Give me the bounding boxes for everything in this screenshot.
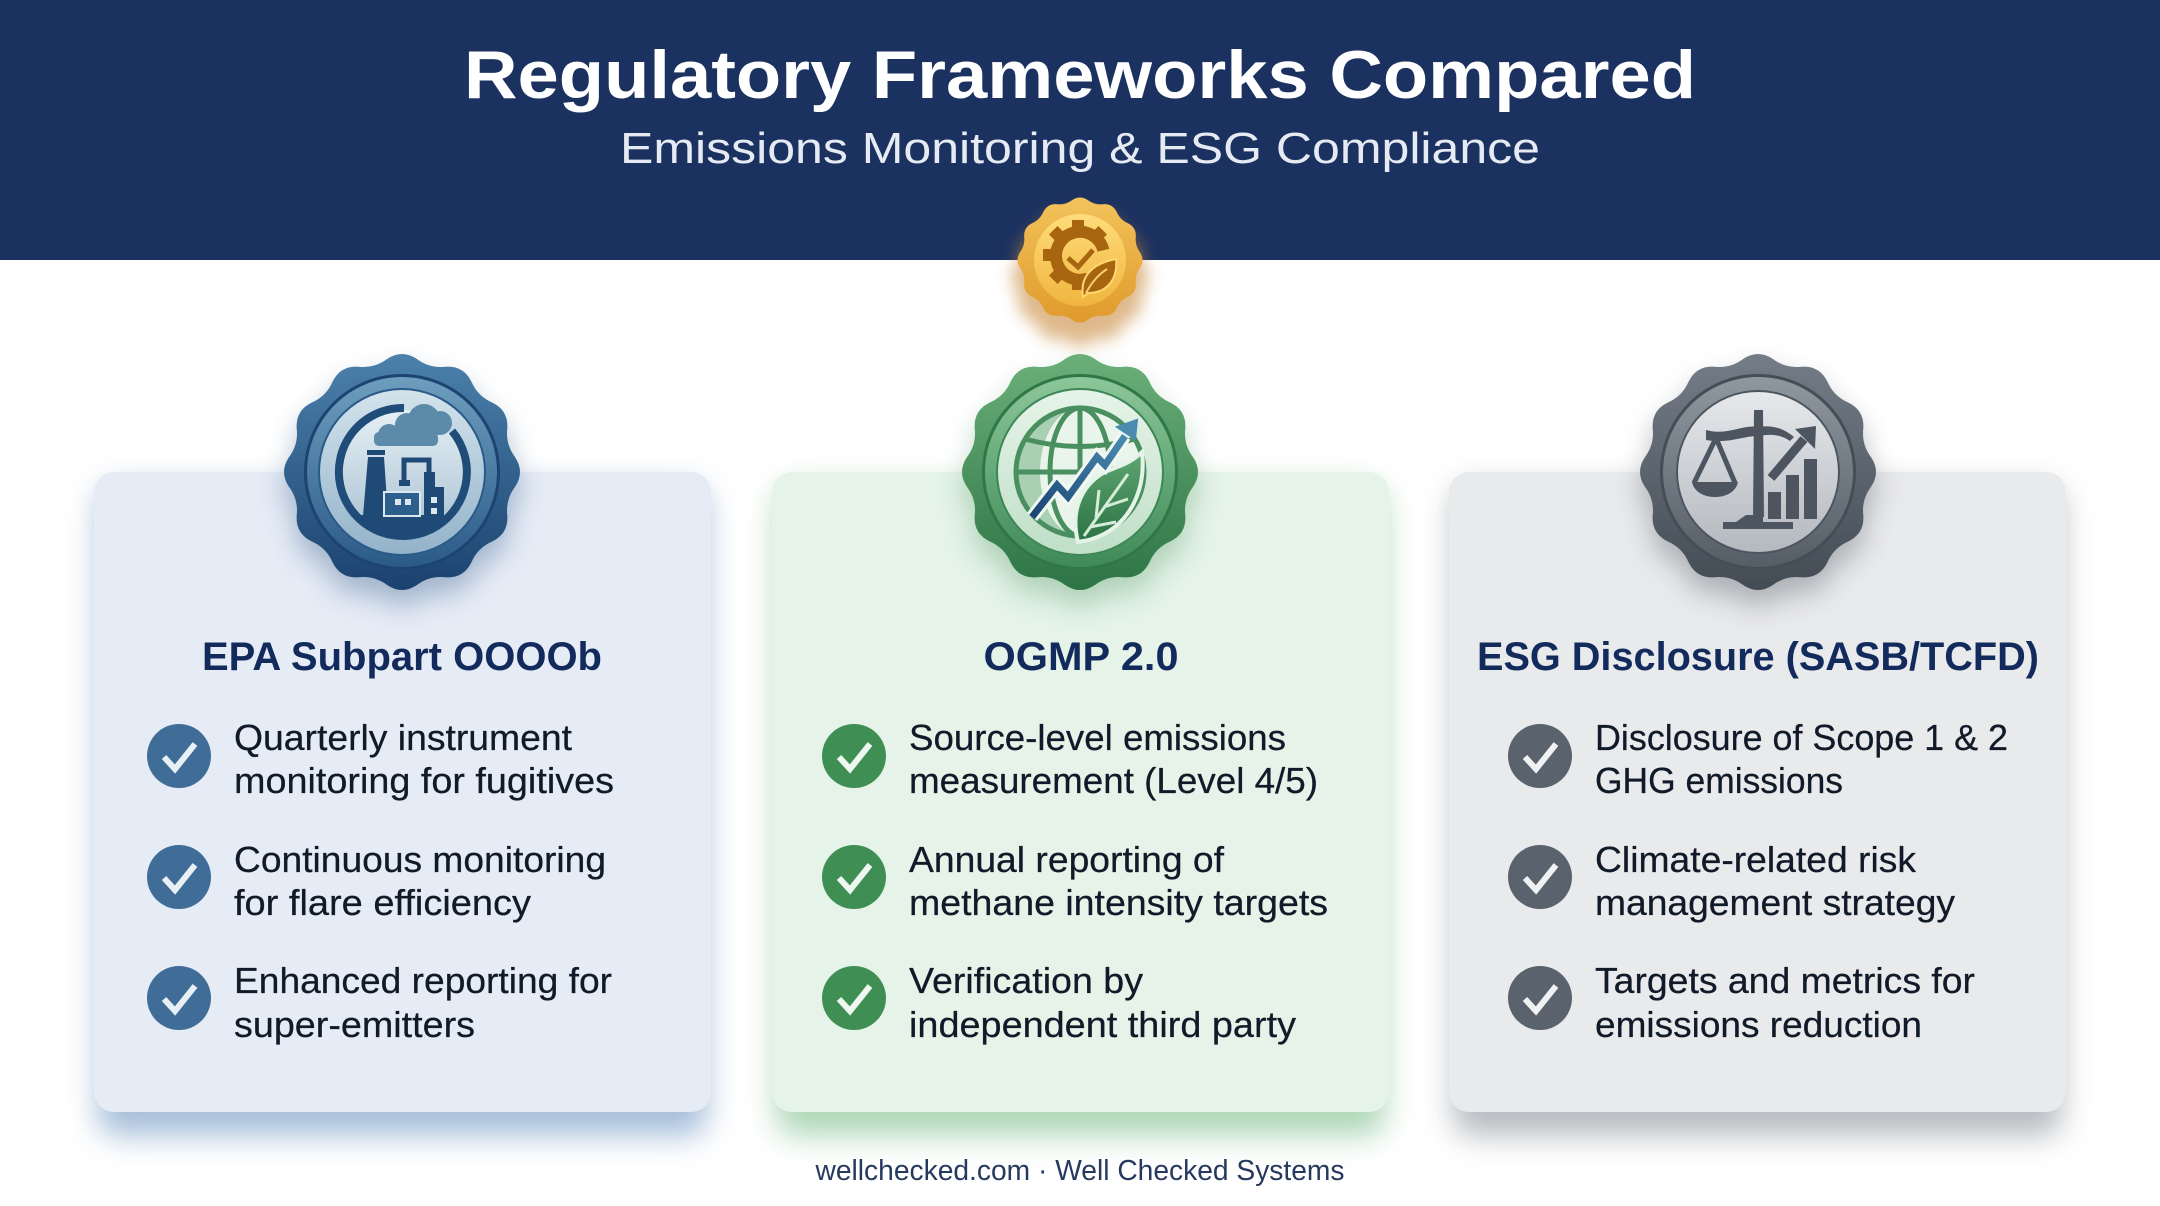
panel: EPA Subpart OOOOb bbox=[94, 354, 711, 1136]
footer: wellchecked.com · Well Checked Systems bbox=[815, 1155, 1344, 1187]
icon: globe, arrow and leaf badge bbox=[962, 354, 1198, 606]
title: Regulatory Frameworks Compared bbox=[464, 37, 1696, 113]
icon: factory badge bbox=[284, 354, 520, 606]
item: targets and metrics: Targets and metrics for bbox=[1595, 960, 1975, 1001]
item: source-level measurement bbox=[822, 717, 1318, 801]
item: targets and metrics: emissions reduction bbox=[1595, 1004, 1922, 1045]
item: enhanced reporting: super-emitters bbox=[234, 1004, 475, 1045]
item: quarterly monitoring bbox=[147, 717, 614, 801]
item: climate risk bbox=[1508, 839, 1955, 923]
item: annual reporting bbox=[822, 839, 1328, 923]
item: source-level measurement: measurement (Level 4/5) bbox=[909, 760, 1318, 801]
item: source-level measurement: Source-level emissions bbox=[909, 717, 1286, 758]
item: verification bbox=[822, 960, 1296, 1045]
item: enhanced reporting bbox=[147, 960, 612, 1045]
item: continuous monitoring: Continuous monitoring bbox=[234, 839, 606, 880]
icon: gold gear badge bbox=[1012, 197, 1148, 346]
item: continuous monitoring: for flare efficiency bbox=[234, 882, 531, 923]
panel: OGMP 2.0 bbox=[772, 354, 1389, 1136]
panel: ESG Disclosure bbox=[1449, 354, 2066, 1136]
item: quarterly monitoring: Quarterly instrument bbox=[234, 717, 572, 758]
icon: scales and bar chart badge bbox=[1640, 354, 1876, 606]
heading: EPA Subpart OOOOb bbox=[202, 635, 602, 679]
item: verification: Verification by bbox=[909, 960, 1143, 1001]
heading: ESG Disclosure (SASB/TCFD) bbox=[1477, 635, 2039, 679]
item: continuous monitoring bbox=[147, 839, 606, 923]
item: targets and metrics bbox=[1508, 960, 1975, 1045]
item: climate risk: Climate-related risk bbox=[1595, 839, 1917, 880]
heading: OGMP 2.0 bbox=[984, 635, 1178, 679]
item: verification: independent third party bbox=[909, 1004, 1296, 1045]
item: annual reporting: Annual reporting of bbox=[909, 839, 1225, 880]
header band bbox=[0, 0, 2160, 260]
item: scope disclosure: GHG emissions bbox=[1595, 760, 1843, 801]
subtitle: Emissions Monitoring & ESG Compliance bbox=[620, 124, 1540, 173]
item: annual reporting: methane intensity targets bbox=[909, 882, 1328, 923]
item: scope disclosure: Disclosure of Scope 1 & 2 bbox=[1595, 717, 2008, 758]
item: enhanced reporting: Enhanced reporting for bbox=[234, 960, 612, 1001]
item: quarterly monitoring: monitoring for fugitives bbox=[234, 760, 614, 801]
item: climate risk: management strategy bbox=[1595, 882, 1955, 923]
item: scope disclosure bbox=[1508, 717, 2008, 801]
